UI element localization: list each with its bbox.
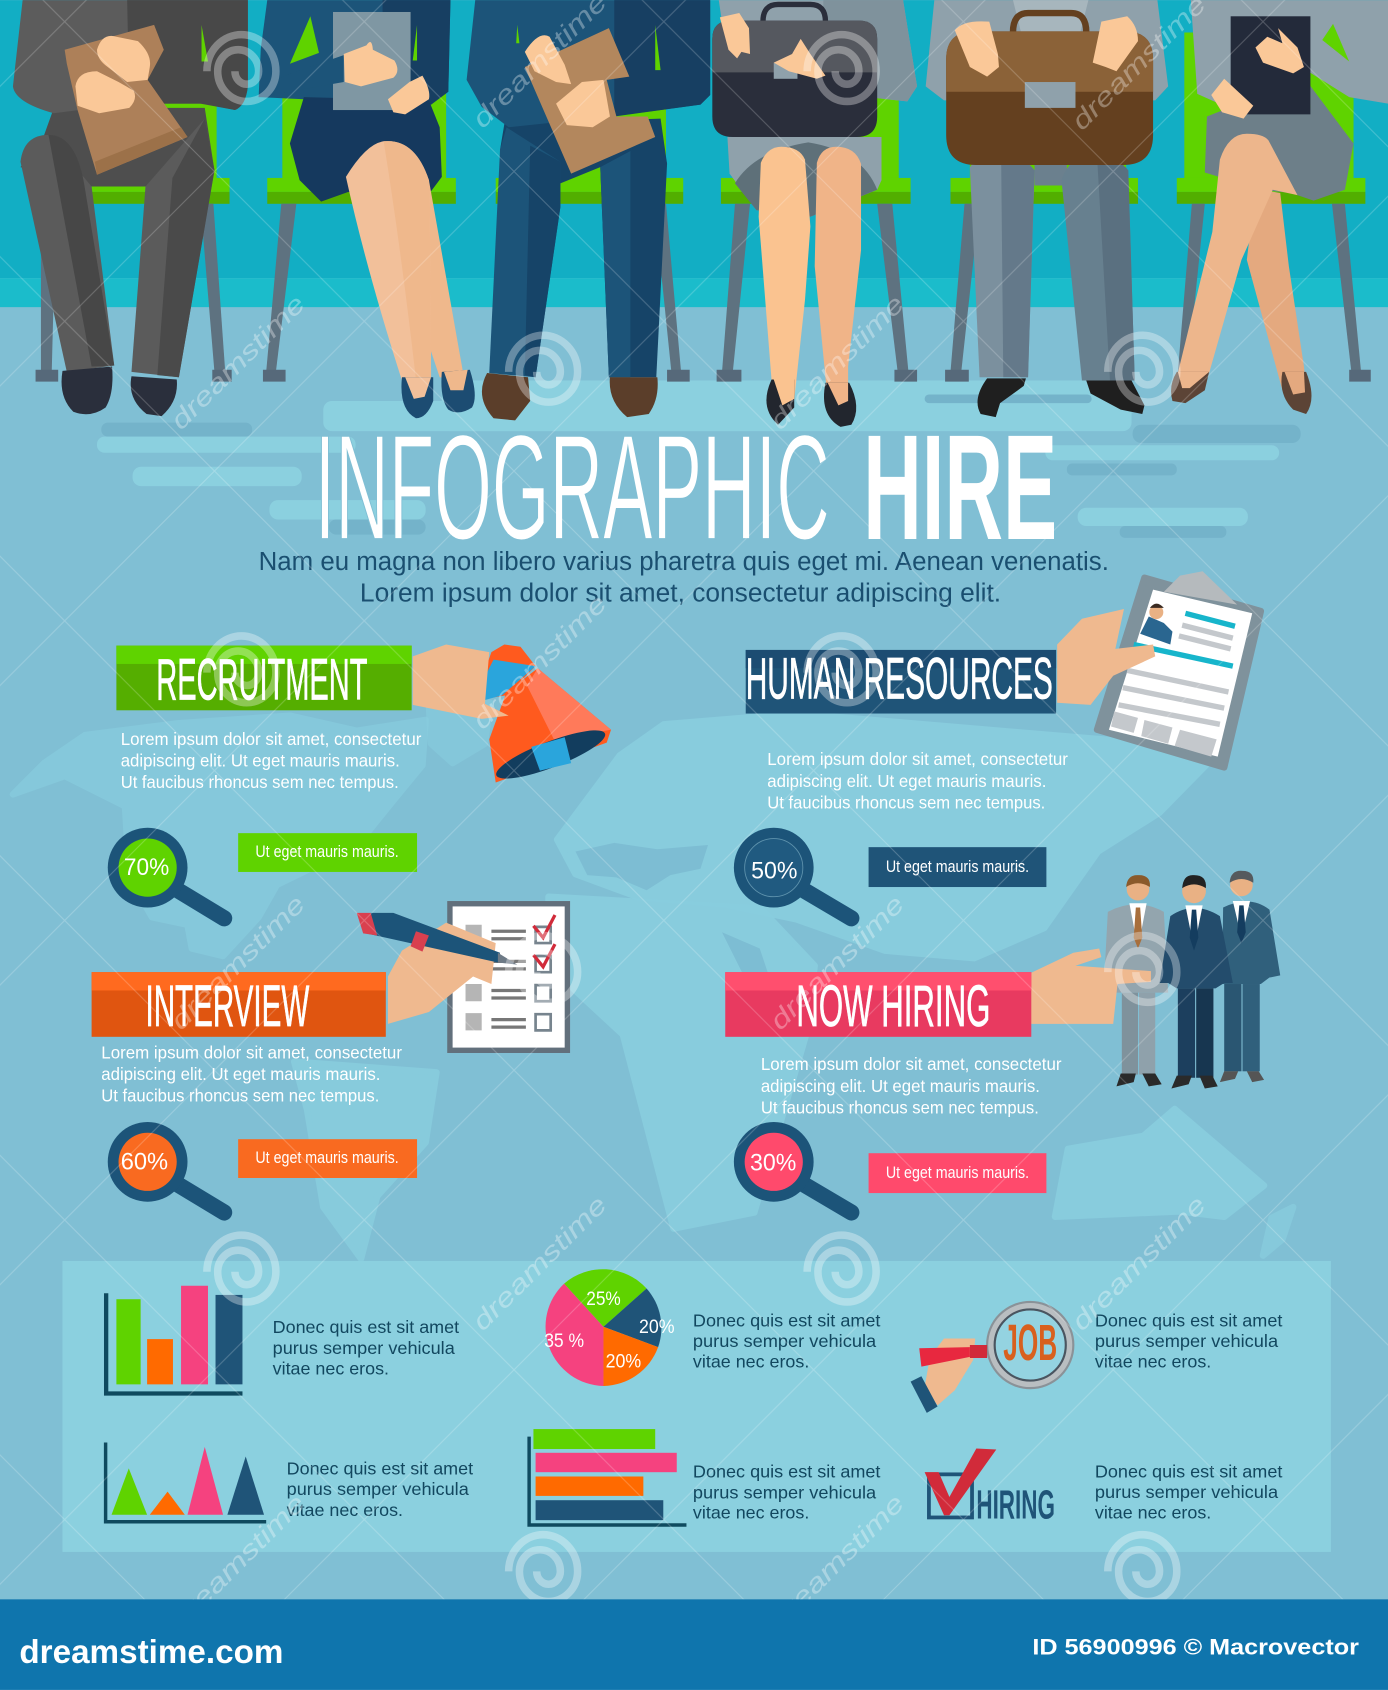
text block: purus semper vehicula bbox=[693, 1331, 876, 1351]
footer bar bbox=[0, 1599, 1388, 1690]
text block bbox=[693, 1462, 880, 1523]
text block bbox=[121, 729, 421, 792]
text block bbox=[693, 1311, 880, 1372]
text block: Lorem ipsum dolor sit amet, consectetur bbox=[121, 729, 421, 749]
text block bbox=[273, 1317, 459, 1379]
person 4: woman with black bag bbox=[712, 0, 917, 427]
man: center navy suit bbox=[1160, 875, 1233, 1089]
text block bbox=[761, 1054, 1062, 1117]
text block: adipiscing elit. Ut eget mauris mauris. bbox=[767, 771, 1046, 791]
text block: vitae nec eros. bbox=[1095, 1503, 1211, 1523]
pie chart bbox=[544, 1269, 675, 1386]
magnifier 50%: 50% bbox=[751, 858, 797, 884]
pie chart: 25% bbox=[586, 1288, 621, 1310]
text block bbox=[287, 1458, 473, 1520]
panel: recruitment bbox=[108, 645, 611, 918]
watermark spirals and text: dreamstime bbox=[165, 890, 311, 1036]
text block: Lorem ipsum dolor sit amet, consectetur bbox=[101, 1042, 402, 1062]
text block: adipiscing elit. Ut eget mauris mauris. bbox=[121, 750, 400, 770]
triangle chart bbox=[106, 1443, 266, 1522]
title: INFOGRAPHIC bbox=[315, 403, 830, 571]
pie chart: 20% bbox=[606, 1351, 641, 1373]
text block: Donec quis est sit amet bbox=[1095, 1311, 1282, 1331]
subtitle: Nam eu magna non libero varius pharetra quis eget mi. Aenean venenatis. bbox=[259, 548, 1109, 576]
watermark spirals and text: dreamstime bbox=[165, 290, 311, 435]
label bbox=[869, 847, 1046, 887]
text block: Donec quis est sit amet bbox=[1095, 1462, 1282, 1482]
banner: HUMAN RESOURCES bbox=[746, 646, 1053, 711]
subtitle bbox=[259, 548, 1109, 607]
watermark spirals and text: dreamstime bbox=[467, 0, 613, 134]
label bbox=[238, 1139, 417, 1178]
watermark spirals and text: dreamstime bbox=[467, 589, 613, 735]
banner bbox=[725, 972, 1031, 1039]
text block: Ut faucibus rhoncus sem nec tempus. bbox=[101, 1085, 379, 1105]
icon: checklist bbox=[447, 901, 570, 1053]
watermark spirals and text: dreamstime bbox=[467, 1191, 613, 1336]
panel: bottom charts bbox=[63, 1261, 1331, 1552]
icon: hiring checkmark bbox=[925, 1448, 1055, 1528]
footer bar: ID 56900996 © Macrovector bbox=[1032, 1634, 1359, 1659]
banner: NOW HIRING bbox=[796, 974, 990, 1039]
man: right blue suit bbox=[1220, 871, 1280, 1082]
label: Ut eget mauris mauris. bbox=[886, 1164, 1029, 1182]
magnifier 60%: 60% bbox=[121, 1149, 168, 1175]
text block bbox=[1095, 1311, 1282, 1372]
floor shadow strips bbox=[97, 381, 1301, 538]
magnifier 50% bbox=[734, 828, 851, 918]
text block: vitae nec eros. bbox=[693, 1352, 809, 1372]
text block: Donec quis est sit amet bbox=[287, 1458, 473, 1478]
text block: Ut faucibus rhoncus sem nec tempus. bbox=[761, 1097, 1039, 1117]
text block: Lorem ipsum dolor sit amet, consectetur bbox=[767, 749, 1068, 769]
text block: Donec quis est sit amet bbox=[273, 1317, 459, 1337]
text block: purus semper vehicula bbox=[1095, 1331, 1278, 1351]
text block: Donec quis est sit amet bbox=[693, 1462, 880, 1482]
watermark spirals and text: dreamstime bbox=[165, 1489, 311, 1635]
text block: vitae nec eros. bbox=[273, 1359, 389, 1379]
magnifier 30%: 30% bbox=[750, 1150, 796, 1176]
horizontal bar chart bbox=[529, 1429, 686, 1525]
text block: Donec quis est sit amet bbox=[693, 1311, 880, 1331]
magnifier 70% bbox=[108, 828, 224, 918]
text block bbox=[101, 1042, 402, 1105]
person 6: woman with dark tablet, crossed legs bbox=[1171, 0, 1388, 414]
panel: now hiring bbox=[725, 871, 1280, 1212]
text block: adipiscing elit. Ut eget mauris mauris. bbox=[101, 1064, 380, 1084]
banner bbox=[746, 646, 1056, 714]
world map bbox=[13, 703, 1293, 1259]
label bbox=[238, 833, 417, 872]
panel: interview bbox=[92, 901, 570, 1212]
text block: vitae nec eros. bbox=[1095, 1352, 1211, 1372]
icon: pointing hand bbox=[1030, 948, 1151, 1024]
banner: RECRUITMENT bbox=[156, 648, 367, 713]
pie chart: 20% bbox=[639, 1316, 675, 1338]
watermark spirals and text: dreamstime bbox=[765, 1489, 910, 1635]
text block: Lorem ipsum dolor sit amet, consectetur bbox=[761, 1054, 1062, 1074]
panel: human resources bbox=[734, 571, 1261, 918]
icon: hand with magnifier JOB: JOB bbox=[1003, 1314, 1057, 1371]
banner: INTERVIEW bbox=[145, 974, 309, 1039]
text block: purus semper vehicula bbox=[1095, 1482, 1278, 1502]
text block bbox=[767, 749, 1068, 812]
text block: purus semper vehicula bbox=[287, 1479, 469, 1499]
pie chart: 35 % bbox=[544, 1330, 584, 1352]
text block: vitae nec eros. bbox=[693, 1503, 809, 1523]
text block: Ut faucibus rhoncus sem nec tempus. bbox=[121, 772, 399, 792]
person 2: woman in navy suit with tablet bbox=[259, 0, 475, 418]
watermark spirals and text: dreamstime bbox=[765, 290, 910, 435]
subtitle: Lorem ipsum dolor sit amet, consectetur adipiscing elit. bbox=[360, 579, 1001, 607]
banner bbox=[92, 972, 386, 1039]
icon: hand holding megaphone bbox=[413, 645, 611, 787]
footer bar: dreamstime.com bbox=[19, 1634, 283, 1671]
icon: three businessmen bbox=[1104, 871, 1280, 1089]
label: Ut eget mauris mauris. bbox=[886, 858, 1029, 876]
bar chart bbox=[106, 1286, 242, 1394]
watermark spirals and text: dreamstime bbox=[1066, 1191, 1212, 1336]
watermark spirals and text: dreamstime bbox=[1066, 0, 1212, 136]
icon: hand with magnifier JOB bbox=[911, 1302, 1073, 1413]
magnifier 30% bbox=[734, 1122, 851, 1212]
label: Ut eget mauris mauris. bbox=[255, 1149, 399, 1167]
text block bbox=[1095, 1462, 1282, 1523]
text block: purus semper vehicula bbox=[693, 1483, 876, 1503]
man: grey suit bbox=[1104, 875, 1168, 1086]
banner bbox=[116, 646, 412, 713]
text block: purus semper vehicula bbox=[273, 1338, 455, 1358]
text block: vitae nec eros. bbox=[287, 1500, 403, 1520]
person 1: man in grey suit with folder bbox=[13, 0, 248, 416]
icon: hand with pen bbox=[357, 913, 517, 1024]
icon: hand holding clipboard with CV bbox=[1057, 571, 1261, 767]
person 3: man in navy suit with folder bbox=[467, 0, 710, 420]
watermark spirals and text: dreamstime bbox=[765, 890, 910, 1036]
text block: adipiscing elit. Ut eget mauris mauris. bbox=[761, 1076, 1040, 1096]
label: Ut eget mauris mauris. bbox=[255, 843, 399, 861]
magnifier 60% bbox=[108, 1122, 224, 1212]
magnifier 70%: 70% bbox=[124, 855, 169, 881]
map seas: Europe and Indian ocean patches bbox=[575, 843, 776, 997]
green waiting chairs bbox=[36, 16, 1371, 382]
label bbox=[869, 1153, 1046, 1193]
icon: hiring checkmark: HIRING bbox=[976, 1482, 1055, 1528]
title: HIRE bbox=[863, 403, 1057, 571]
person 5: man with brown bag bbox=[926, 0, 1168, 417]
text block: Ut faucibus rhoncus sem nec tempus. bbox=[767, 792, 1045, 812]
